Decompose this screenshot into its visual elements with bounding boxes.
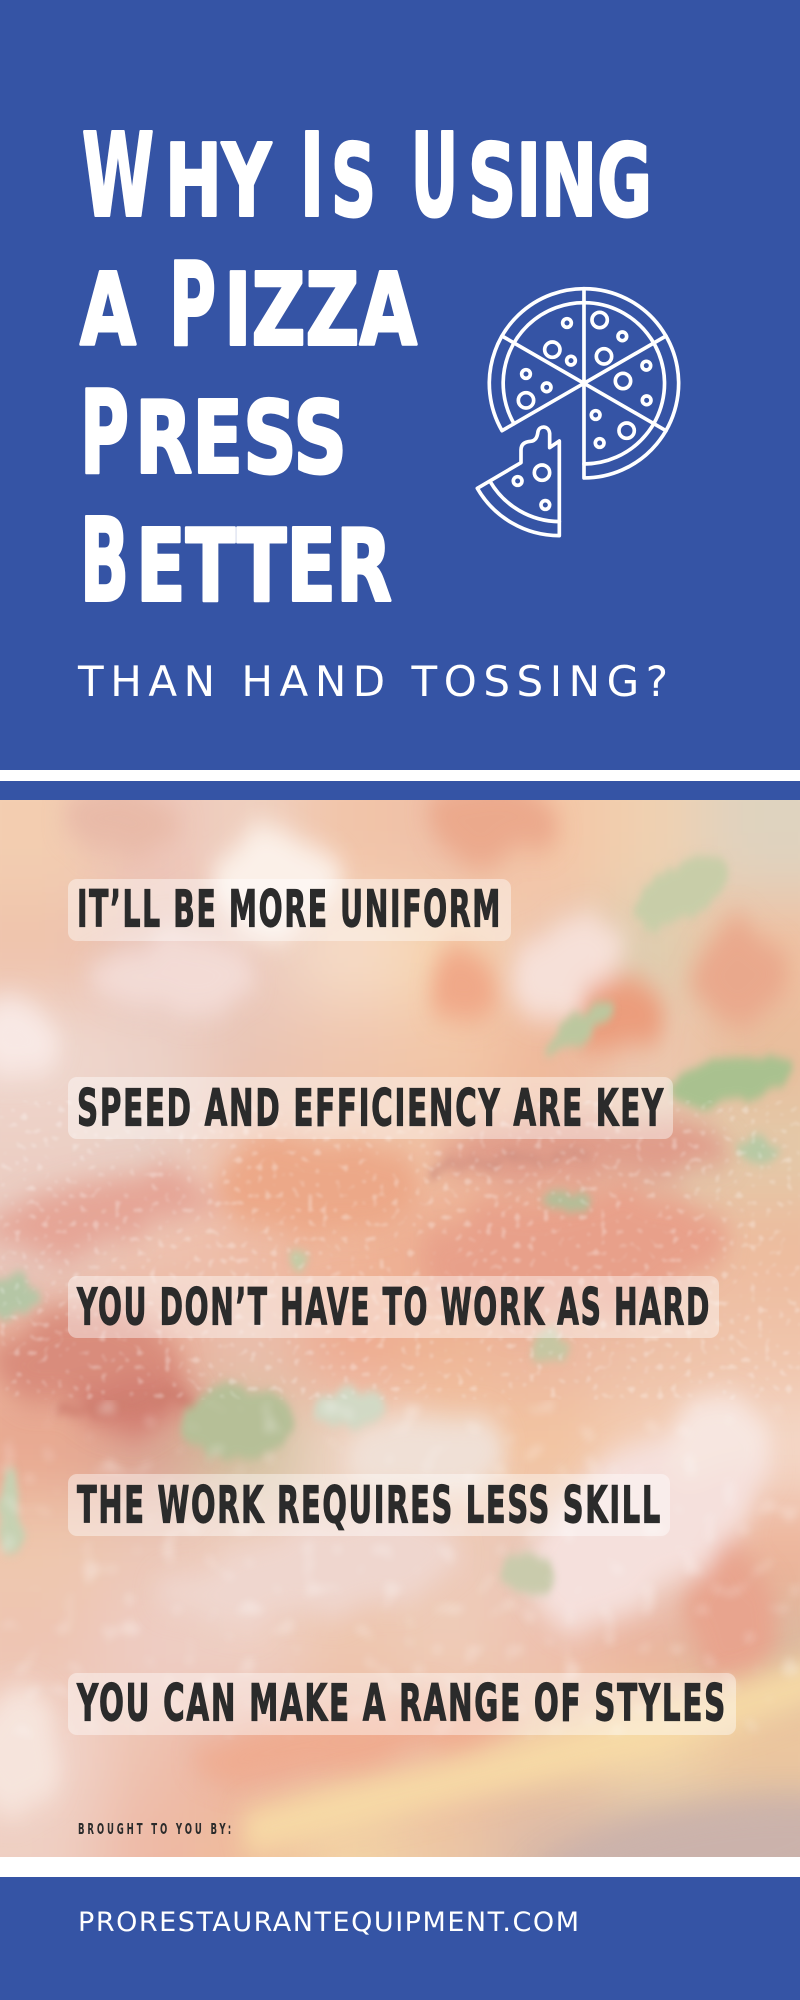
title: HY	[165, 122, 272, 240]
header panel	[0, 0, 800, 800]
icon part: separated slice	[477, 427, 559, 536]
footer website: PRORESTAURANTEQUIPMENT.COM	[78, 1907, 579, 1938]
title: A	[80, 252, 136, 368]
title: RESS	[135, 380, 347, 496]
title: B	[80, 494, 129, 628]
title: I	[300, 110, 324, 244]
title: SING	[468, 122, 652, 240]
title: IZZA	[224, 252, 417, 368]
title: W	[82, 110, 154, 244]
title: S	[331, 122, 376, 240]
title: U	[411, 110, 458, 244]
icon: pizza with slice removed	[477, 289, 679, 536]
title: P	[80, 366, 129, 500]
photo background: blurred pizza	[0, 800, 800, 1857]
list item 1	[68, 879, 511, 941]
title	[80, 110, 652, 628]
brought to you by label: BROUGHT TO YOU BY:	[78, 1820, 234, 1838]
title: ETTER	[136, 508, 392, 624]
photo bokeh texture	[0, 1400, 800, 1740]
footer panel	[0, 1877, 800, 2000]
subtitle: THAN HAND TOSSING?	[77, 657, 668, 706]
icon part: pizza crust and spokes	[489, 289, 679, 478]
title: P	[169, 238, 216, 372]
icon part: pizza toppings	[518, 312, 651, 447]
photo sparkle texture	[0, 1100, 800, 1400]
